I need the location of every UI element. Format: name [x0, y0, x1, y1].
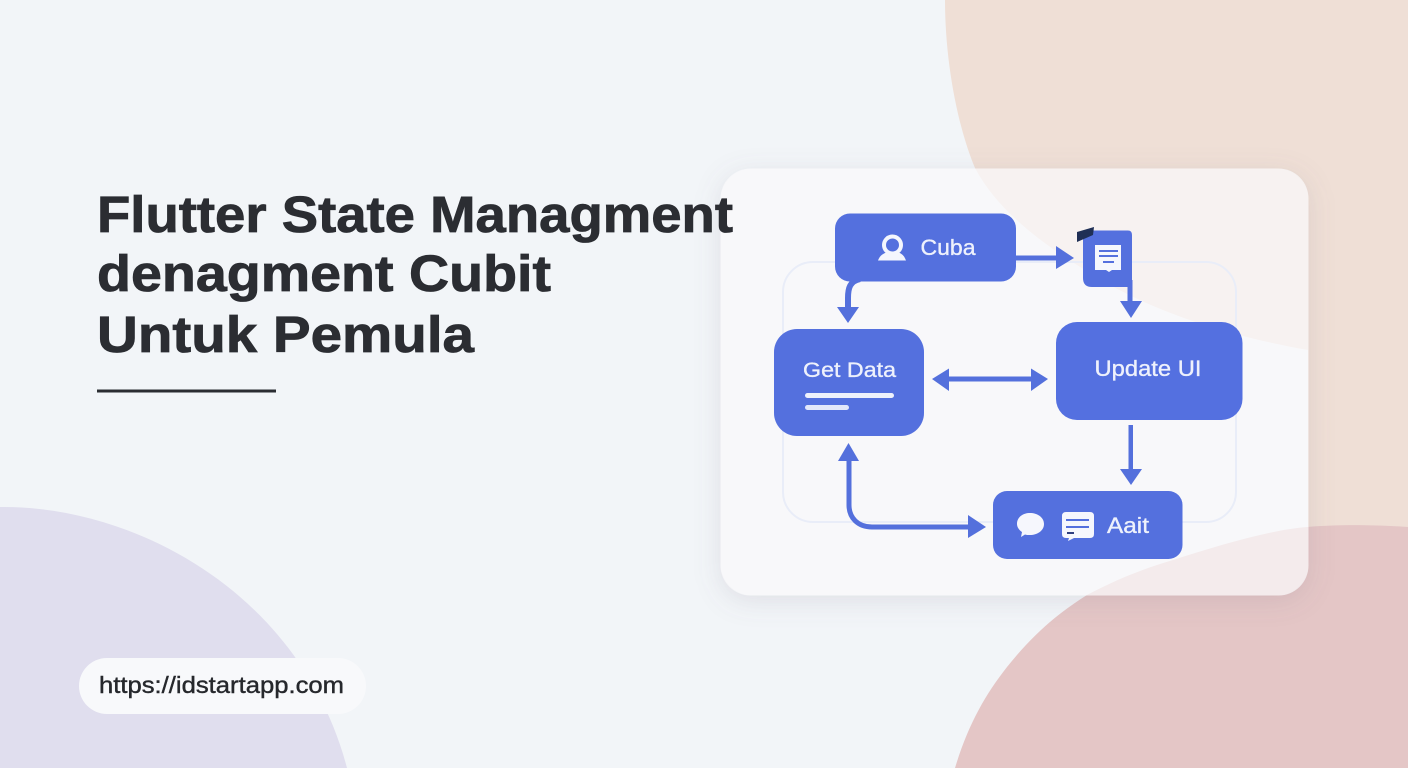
arrow: Cuba to document [1016, 246, 1074, 269]
background blob: pink bottom right [955, 525, 1408, 768]
panel: diagram card [720, 168, 1308, 601]
node: Cuba [835, 214, 1016, 282]
text lines [805, 393, 894, 410]
arrow: Update UI to Aait [1120, 425, 1142, 485]
inner outline frame [783, 262, 1236, 522]
label: Aait: Aait [1107, 513, 1149, 538]
label: Get Data: Get Data [803, 359, 896, 382]
background blob: peach top right [945, 0, 1408, 540]
url text: https://idstartapp.com [99, 672, 344, 698]
icon: speech bubble [1017, 513, 1044, 537]
node: document icon [1077, 227, 1132, 287]
title: Untuk Pemula [97, 306, 475, 363]
node: Update UI [1056, 322, 1242, 420]
title: Flutter State Managment [97, 186, 733, 243]
title [97, 186, 733, 363]
icon: message card [1062, 512, 1094, 541]
background blob: lavender bottom left [0, 507, 347, 768]
arrow: Aait and Get Data two-way [838, 443, 986, 538]
node: Get Data [774, 329, 924, 436]
title: denagment Cubit [97, 245, 551, 302]
label: Cuba: Cuba [920, 235, 976, 260]
arrow: Get Data and Update UI two-way [932, 368, 1048, 391]
dark corner tab [1077, 227, 1094, 242]
label: Update UI: Update UI [1094, 356, 1202, 381]
arrow: document to Update UI [1120, 280, 1142, 318]
icon: user [878, 236, 906, 260]
title underline [97, 390, 276, 392]
node: Aait [993, 491, 1182, 559]
url pill [79, 658, 366, 714]
document glyph [1095, 245, 1121, 272]
arrow: Cuba to Get Data [837, 279, 860, 323]
